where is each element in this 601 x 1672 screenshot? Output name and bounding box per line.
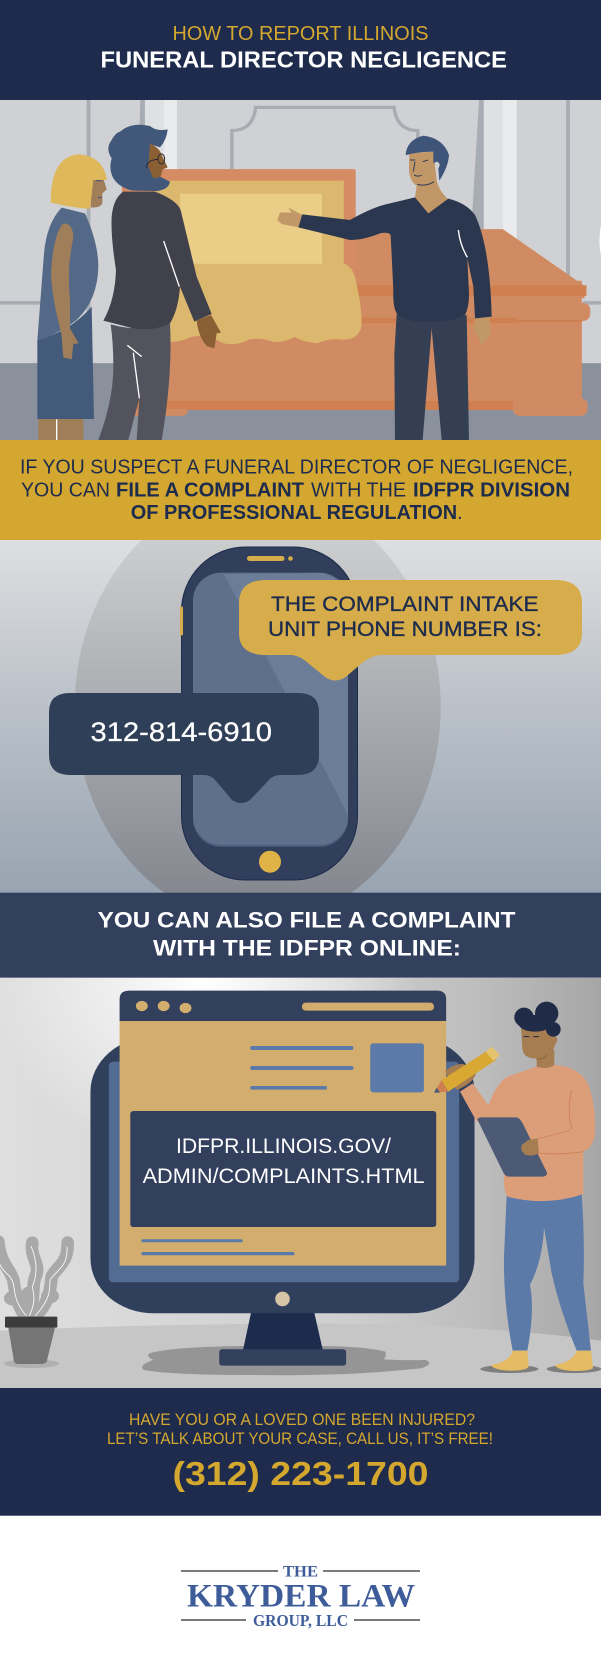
text: complaint intake: THE COMPLAINT INTAKE [271,592,538,616]
panel: monitor scene [0,978,601,1389]
heading: how to report illinois: HOW TO REPORT ILLINOIS [172,22,428,45]
text: 312-814-6910: 312-814-6910 [90,717,272,747]
text: website url line two: ADMIN/COMPLAINTS.HTML [143,1165,425,1188]
heading: funeral director negligence: FUNERAL DIRECTOR NEGLIGENCE [100,47,507,73]
text: line two: YOU CAN [21,478,110,502]
panel: gold intro statement [0,440,601,540]
figure: funeral director [277,136,492,440]
speech bubble: dark with number [49,693,319,803]
casket [122,169,590,416]
panel: phone number [0,540,601,893]
text: unit phone number: UNIT PHONE NUMBER IS: [268,617,542,641]
band: online complaint heading [0,893,601,978]
text: line two: FILE A COMPLAINT [116,478,304,502]
text: website url line one: IDFPR.ILLINOIS.GOV/ [176,1135,391,1158]
logo: the kryder law group [181,1564,420,1630]
figure: person with clipboard [434,1002,601,1373]
icon: smartphone [180,547,358,880]
text: line two: WITH THE [311,478,406,502]
header banner [0,0,601,100]
logo: the kryder law group: GROUP, LLC [253,1611,348,1630]
text: injured question: HAVE YOU OR A LOVED ONE BEEN INJURED? [129,1411,475,1429]
logo: the kryder law group: THE [283,1564,318,1581]
text: line two: WITH THE IDFPR ONLINE: [153,936,461,961]
panel: call to action footer [0,1388,601,1516]
text: line one: YOU CAN ALSO FILE A COMPLAINT [98,908,516,933]
text: line three: . [457,501,463,524]
figure: bearded man [98,125,221,440]
text: line two: IDFPR DIVISION [413,478,570,502]
text: line three: OF PROFESSIONAL REGULATION [131,501,457,524]
logo: the kryder law group: KRYDER LAW [187,1579,415,1615]
text: phone number: (312) 223-1700 [172,1456,428,1493]
figure: woman [37,154,107,440]
text: line two [21,478,570,502]
text: line one: IF YOU SUSPECT A FUNERAL DIRECTOR OF NEGLIGENCE, [20,456,573,479]
icon: desktop monitor [90,991,475,1375]
text: talk about your case: LET’S TALK ABOUT YOUR CASE, CALL US, IT’S FREE! [107,1430,493,1448]
speech bubble: gold [239,580,582,681]
background circle [75,540,441,893]
panel: funeral home scene [0,100,601,440]
icon: plant [0,1242,68,1368]
